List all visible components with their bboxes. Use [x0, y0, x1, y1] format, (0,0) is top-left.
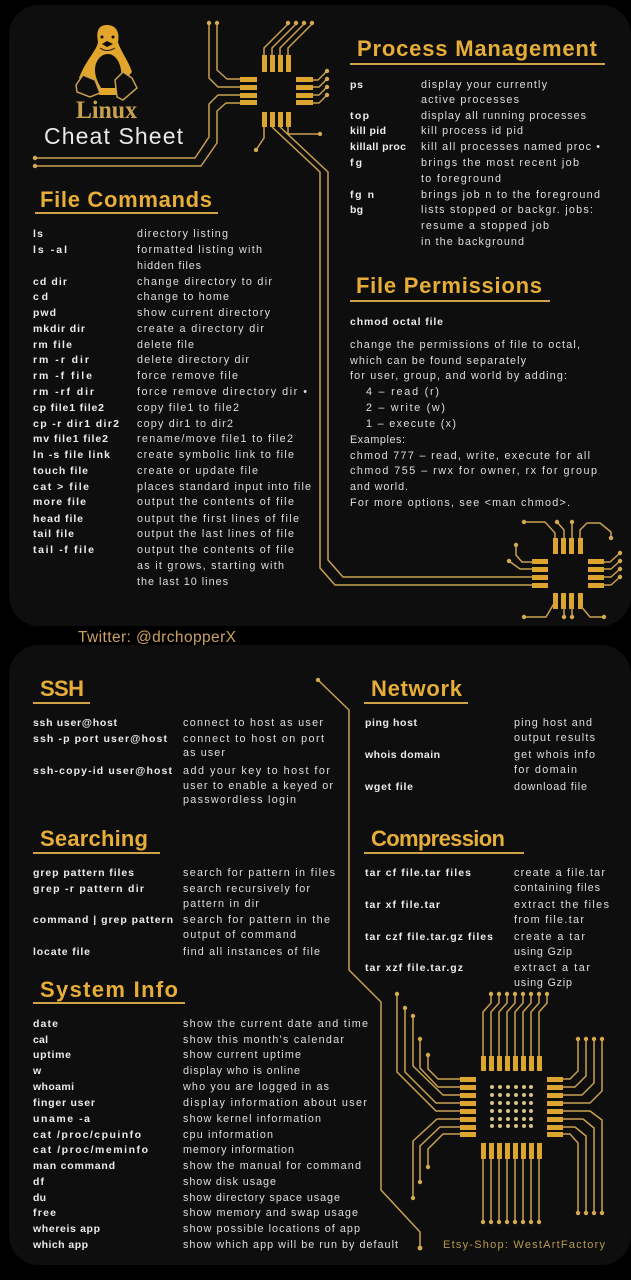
- table: file commands: output the last lines of file: [137, 528, 294, 540]
- credit: Twitter handle: Twitter: @drchopperX: [78, 629, 237, 646]
- table: process management: active processes: [421, 94, 520, 106]
- table: system info: df: [33, 1176, 44, 1188]
- text block: file permissions: [349, 316, 597, 509]
- table: file commands: rename/move file1 to file2: [137, 433, 293, 445]
- table: file commands: show current directory: [137, 307, 271, 319]
- table: file commands: [33, 228, 311, 588]
- table: process management: ps: [350, 79, 363, 91]
- table: system info: display information about user: [183, 1097, 367, 1109]
- table: system info: free: [33, 1207, 56, 1219]
- table: SSH: connect to host as user: [183, 717, 323, 729]
- table: searching: command | grep pattern: [33, 914, 173, 926]
- table: searching: search for pattern in files: [183, 867, 336, 879]
- text block: file permissions: 1 – execute (x): [366, 418, 456, 430]
- table: process management: top: [350, 110, 369, 122]
- table: process management: display all running processes: [421, 110, 587, 122]
- table: file commands: tail file: [33, 528, 74, 540]
- title: Linux: Linux: [76, 97, 137, 124]
- table: compression: [365, 867, 610, 989]
- table: file commands: as it grows, starting with: [137, 560, 284, 572]
- table: process management: fg n: [350, 189, 374, 201]
- table: searching: output of command: [183, 929, 296, 941]
- table: file commands: touch file: [33, 465, 88, 477]
- table: compression: create a tar: [514, 931, 585, 943]
- table: SSH: add your key to host for: [183, 765, 330, 777]
- table: process management: kill all processes named proc •: [421, 141, 600, 153]
- table: system info: cpu information: [183, 1129, 273, 1141]
- text block: file permissions: 4 – read (r): [366, 386, 439, 398]
- text block: file permissions: which can be found separately: [349, 355, 527, 367]
- table: system info: display who is online: [183, 1065, 300, 1077]
- table: compression: containing files: [514, 882, 601, 894]
- table: file commands: places standard input into file: [137, 481, 311, 493]
- table: network: output results: [514, 732, 596, 744]
- credit: Etsy shop: Etsy-Shop: WestArtFactory: [443, 1239, 606, 1251]
- table: file commands: output the contents of file: [137, 544, 294, 556]
- table: system info: du: [33, 1192, 46, 1204]
- table: system info: show disk usage: [183, 1176, 276, 1188]
- table: file commands: ln -s file link: [33, 449, 110, 461]
- table: file commands: ls -al: [33, 244, 67, 256]
- table: file commands: output the contents of file: [137, 496, 294, 508]
- table: file commands: create symbolic link to file: [137, 449, 294, 461]
- table: file commands: mv file1 file2: [33, 433, 108, 445]
- circuit: large chip: [395, 992, 604, 1224]
- table: file commands: create a directory dir: [137, 323, 264, 335]
- table: process management: fg: [350, 157, 362, 169]
- heading: System Info: System Info: [40, 977, 178, 1002]
- table: system info: show kernel information: [183, 1113, 321, 1125]
- heading: Process Management: Process Management: [357, 36, 598, 61]
- table: compression: from file.tar: [514, 914, 584, 926]
- text block: file permissions: Examples:: [350, 434, 405, 446]
- table: compression: tar xf file.tar: [365, 899, 440, 911]
- table: network: ping host and: [514, 717, 592, 729]
- heading: Compression: Compression: [371, 826, 505, 851]
- table: file commands: force remove file: [137, 370, 238, 382]
- table: compression: extract the files: [514, 899, 610, 911]
- heading: File Permissions: File Permissions: [356, 273, 542, 298]
- table: network: for domain: [514, 764, 577, 776]
- table: searching: grep pattern files: [33, 867, 134, 879]
- table: system info: which app: [32, 1239, 88, 1251]
- table: process management: [350, 79, 600, 248]
- table: file commands: more file: [33, 496, 86, 508]
- table: system info: cal: [33, 1034, 48, 1046]
- table: file commands: change directory to dir: [137, 276, 272, 288]
- heading: Network: Network: [371, 676, 463, 701]
- table: file commands: create or update file: [137, 465, 258, 477]
- table: system info: show the manual for command: [183, 1160, 361, 1172]
- table: network: download file: [514, 781, 587, 793]
- table: file commands: hidden files: [137, 260, 202, 272]
- table: file commands: pwd: [33, 307, 56, 319]
- table: SSH: user to enable a keyed or: [183, 780, 333, 792]
- table: SSH: connect to host on port: [183, 733, 324, 745]
- table: searching: locate file: [33, 946, 90, 958]
- table: file commands: cd: [33, 291, 48, 303]
- table: SSH: passwordless login: [183, 794, 296, 806]
- table: searching: [33, 867, 336, 958]
- table: network: [364, 717, 596, 793]
- table: network: get whois info: [514, 749, 595, 761]
- table: system info: show the current date and time: [183, 1018, 368, 1030]
- table: system info: show which app will be run by default: [183, 1239, 398, 1251]
- table: compression: using Gzip: [514, 977, 572, 989]
- text block: file permissions: change the permissions of file to octal,: [350, 339, 580, 351]
- text block: file permissions: chmod 755 – rwx for owner, rx for group: [350, 465, 597, 477]
- table: SSH: [33, 717, 333, 806]
- table: system info: whereis app: [32, 1223, 100, 1235]
- table: file commands: rm file: [33, 339, 72, 351]
- table: system info: [32, 1018, 398, 1251]
- table: file commands: copy file1 to file2: [137, 402, 239, 414]
- table: file commands: output the first lines of file: [137, 513, 299, 525]
- text block: file permissions: and world.: [350, 481, 408, 493]
- table: file commands: force remove directory dir •: [137, 386, 307, 398]
- table: file commands: rm -f file: [33, 370, 92, 382]
- panel: top cheat sheet: [9, 5, 631, 626]
- text block: file permissions: chmod 777 – read, write, execute for all: [350, 450, 590, 462]
- table: SSH: as user: [183, 747, 225, 759]
- table: file commands: cat > file: [33, 481, 89, 493]
- table: process management: in the background: [421, 236, 524, 248]
- table: process management: kill pid: [350, 125, 386, 137]
- heading: Searching: Searching: [40, 826, 148, 851]
- table: system info: show possible locations of app: [183, 1223, 360, 1235]
- text block: file permissions: chmod octal file: [350, 316, 443, 328]
- table: SSH: ssh-copy-id user@host: [33, 765, 172, 777]
- table: system info: who you are logged in as: [182, 1081, 330, 1093]
- table: system info: show this month's calendar: [183, 1034, 344, 1046]
- table: searching: search recursively for: [183, 883, 310, 895]
- heading: SSH: SSH: [40, 676, 84, 701]
- table: compression: tar xzf file.tar.gz: [365, 962, 463, 974]
- icon: Linux penguin: [76, 25, 137, 100]
- table: file commands: the last 10 lines: [137, 576, 229, 588]
- table: system info: cat /proc/cpuinfo: [33, 1129, 141, 1141]
- table: searching: search for pattern in the: [183, 914, 330, 926]
- table: system info: cat /proc/meminfo: [33, 1144, 148, 1156]
- table: compression: create a file.tar: [514, 867, 605, 879]
- table: file commands: directory listing: [137, 228, 228, 240]
- table: compression: tar czf file.tar.gz files: [365, 931, 493, 943]
- table: system info: w: [32, 1065, 42, 1077]
- table: system info: uptime: [33, 1049, 71, 1061]
- table: file commands: mkdir dir: [33, 323, 85, 335]
- table: file commands: formatted listing with: [137, 244, 262, 256]
- table: system info: show memory and swap usage: [183, 1207, 358, 1219]
- table: system info: date: [33, 1018, 58, 1030]
- heading: File Commands: File Commands: [40, 187, 212, 212]
- title: Cheat Sheet: Cheat Sheet: [44, 123, 184, 149]
- panel: bottom cheat sheet: [9, 645, 631, 1265]
- table: system info: whoami: [32, 1081, 74, 1093]
- circuit: lower right chip: [507, 520, 622, 619]
- table: process management: kill process id pid: [421, 125, 523, 137]
- table: file commands: copy dir1 to dir2: [137, 418, 233, 430]
- table: network: wget file: [364, 781, 413, 793]
- table: system info: show directory space usage: [183, 1192, 340, 1204]
- table: process management: brings job n to the foreground: [421, 189, 600, 201]
- table: file commands: rm -rf dir: [33, 386, 94, 398]
- table: file commands: ls: [33, 228, 43, 240]
- table: system info: memory information: [183, 1144, 294, 1156]
- table: network: ping host: [365, 717, 418, 729]
- text block: file permissions: For more options, see <man chmod>.: [350, 497, 570, 509]
- table: file commands: delete file: [137, 339, 194, 351]
- table: file commands: cd dir: [33, 276, 67, 288]
- text block: file permissions: 2 – write (w): [366, 402, 445, 414]
- table: process management: brings the most recent job: [421, 157, 579, 169]
- table: file commands: head file: [33, 513, 83, 525]
- circuit: top chip: [33, 21, 532, 585]
- table: process management: to foreground: [421, 173, 501, 185]
- table: file commands: change to home: [137, 291, 229, 303]
- table: system info: uname -a: [33, 1113, 90, 1125]
- table: file commands: cp -r dir1 dir2: [33, 418, 119, 430]
- table: file commands: tail -f file: [33, 544, 94, 556]
- table: network: whois domain: [364, 749, 440, 761]
- table: process management: lists stopped or backgr. jobs:: [421, 204, 593, 216]
- table: file commands: rm -r dir: [33, 354, 89, 366]
- table: file commands: cp file1 file2: [33, 402, 104, 414]
- table: searching: pattern in dir: [183, 898, 259, 910]
- table: searching: find all instances of file: [183, 946, 320, 958]
- table: process management: killall proc: [350, 141, 406, 153]
- table: process management: bg: [350, 204, 363, 216]
- table: SSH: ssh user@host: [33, 717, 118, 729]
- table: searching: grep -r pattern dir: [33, 883, 144, 895]
- table: process management: display your currently: [421, 79, 548, 91]
- table: process management: resume a stopped job: [421, 220, 549, 232]
- table: compression: using Gzip: [514, 946, 572, 958]
- table: system info: man command: [33, 1160, 115, 1172]
- table: file commands: delete directory dir: [137, 354, 249, 366]
- text block: file permissions: for user, group, and world by adding:: [350, 370, 567, 382]
- table: compression: extract a tar: [514, 962, 590, 974]
- table: compression: tar cf file.tar files: [365, 867, 471, 879]
- table: system info: show current uptime: [183, 1049, 301, 1061]
- circuit: central divider trace: [316, 678, 422, 1250]
- table: SSH: ssh -p port user@host: [33, 733, 168, 745]
- table: system info: finger user: [33, 1097, 95, 1109]
